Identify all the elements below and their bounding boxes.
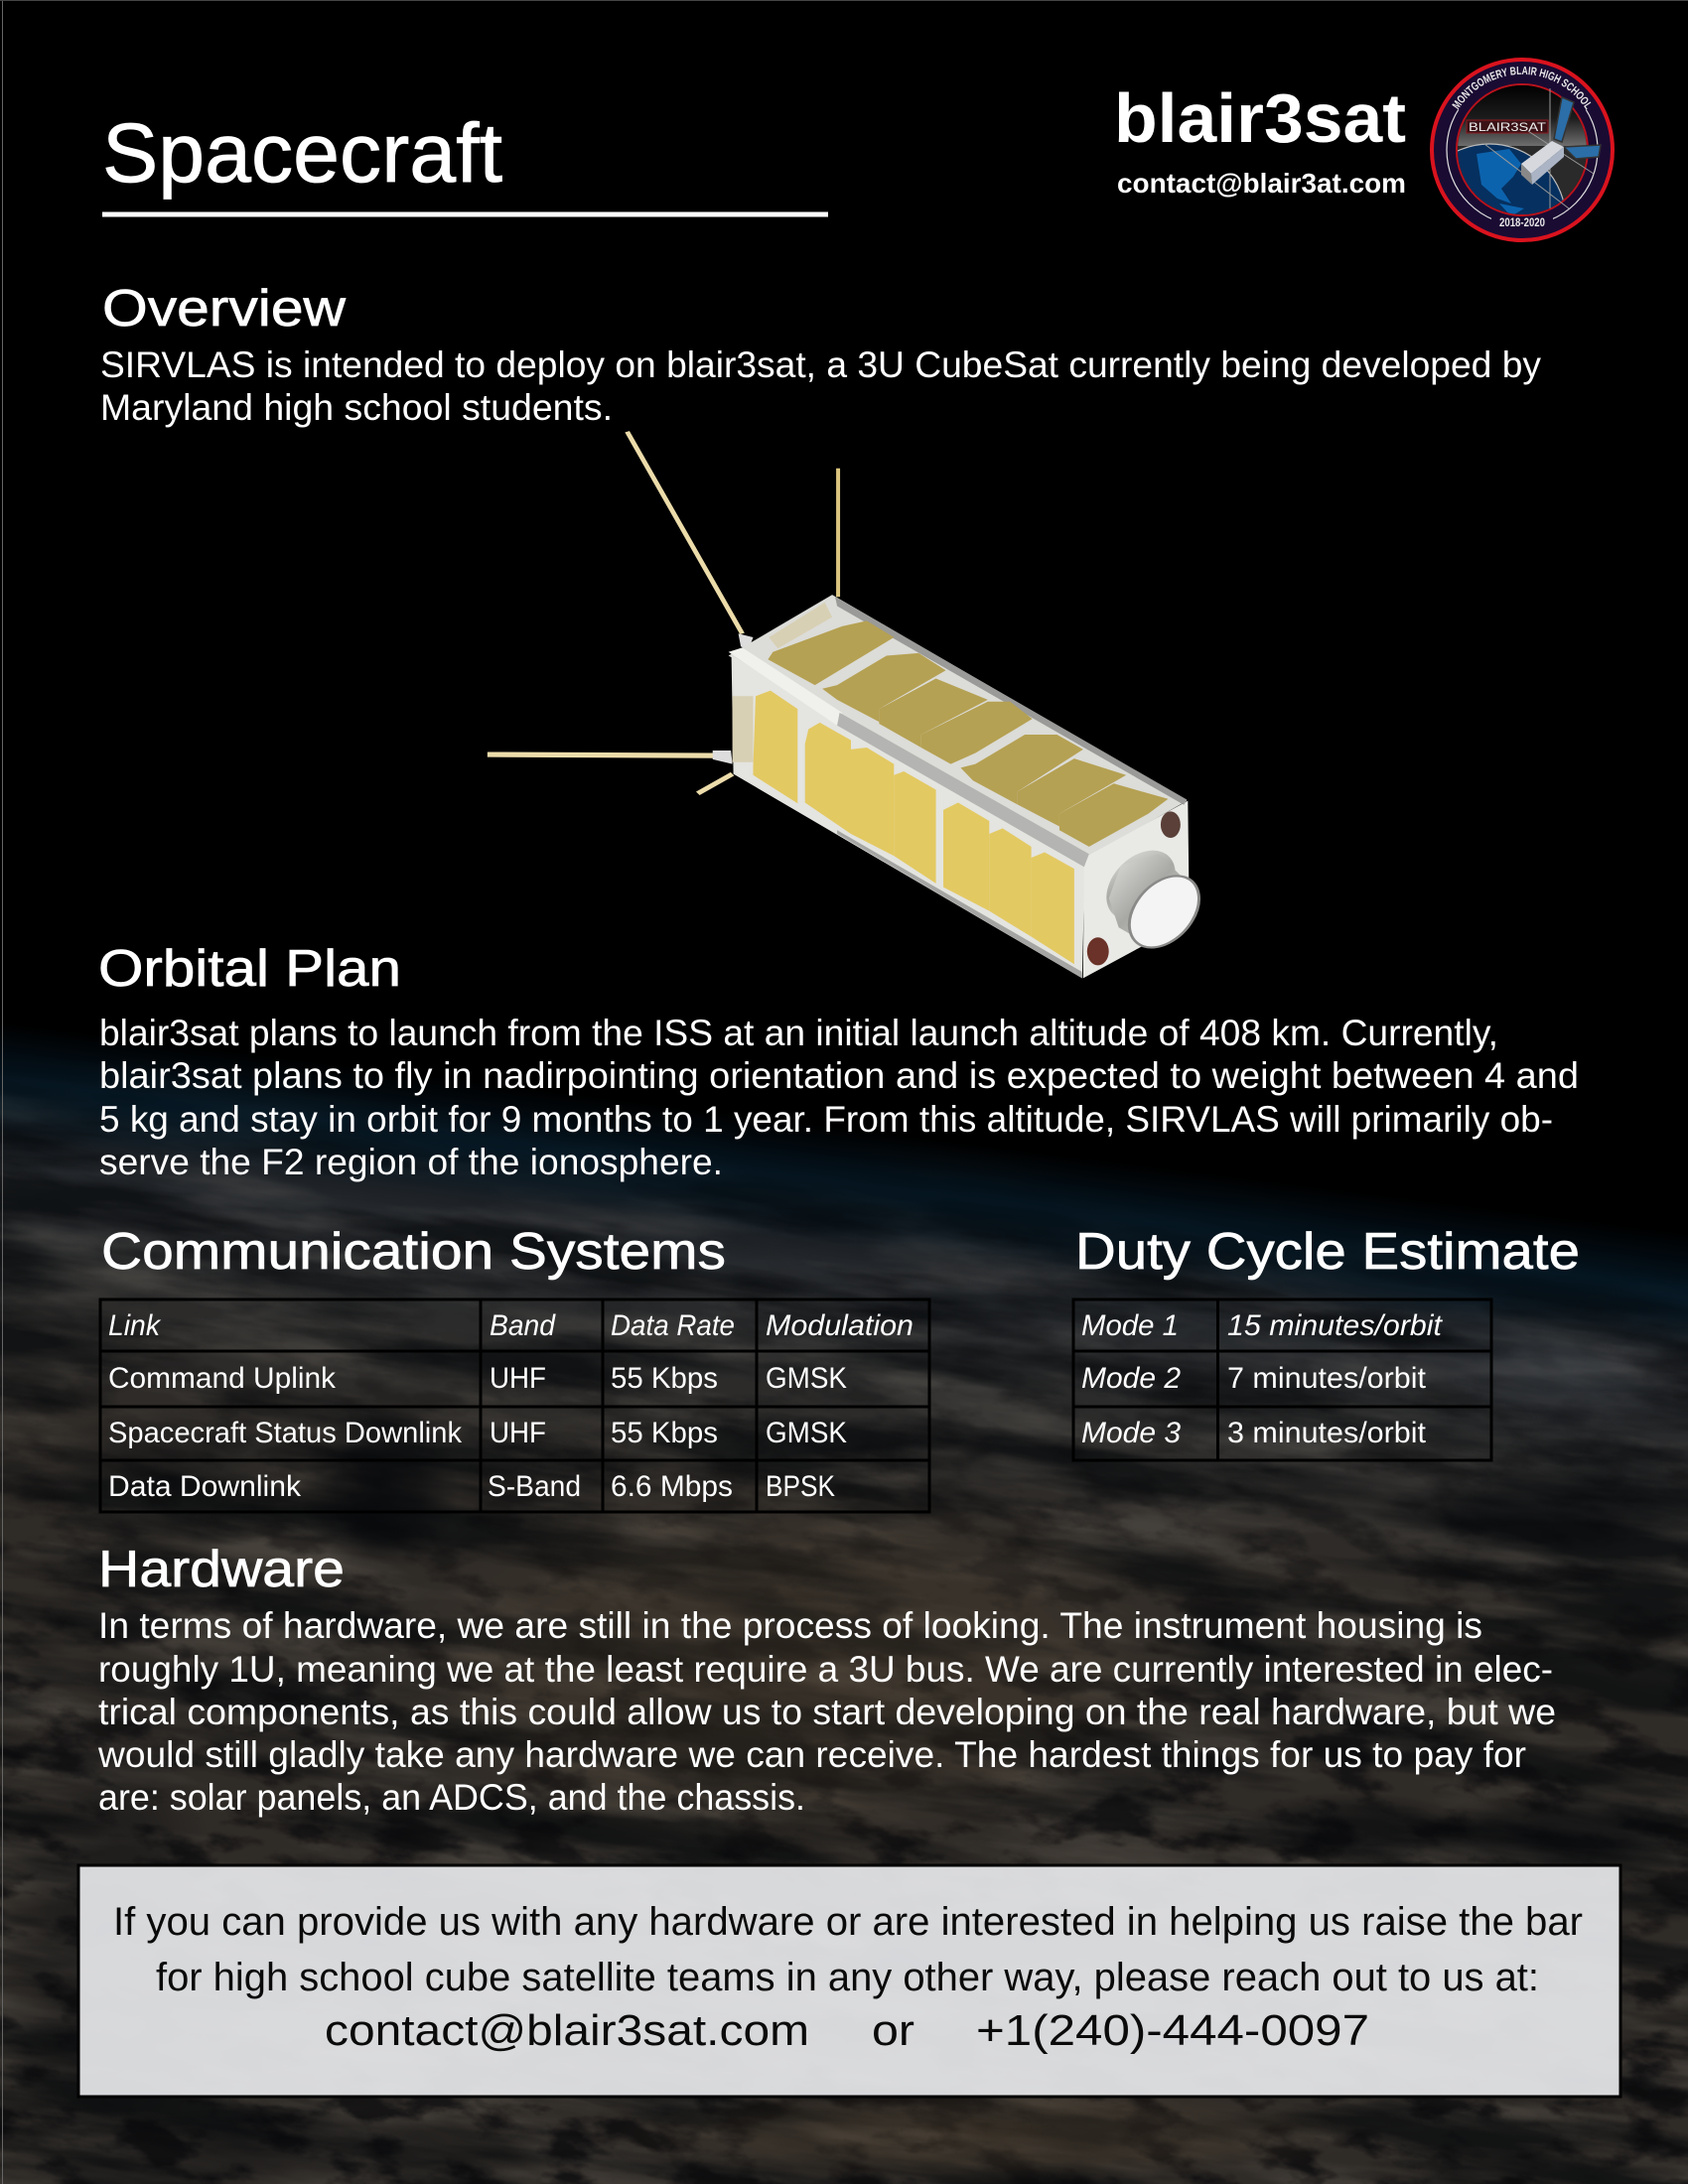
mode 1: Mode 1 [1081,1309,1179,1342]
orbital plan text [99,1013,1579,1182]
hardware text: In terms of hardware, we are still in the process of looking. The instrument housing is [98,1605,1482,1646]
title [102,106,828,216]
hardware text: are: solar panels, an ADCS, and the chassis. [98,1777,805,1818]
table: duty cycle [1073,1299,1491,1460]
overview text [100,344,1541,428]
row: data downlink: Data Downlink [108,1470,302,1503]
orbital plan text: blair3sat plans to fly in nadirpointing orientation and is expected to weight between 4 and [99,1055,1579,1096]
icon: mission patch: MONTGOMERY BLAIR HIGH SCHOOL [1452,67,1591,109]
hardware heading: Hardware [98,1541,345,1598]
header row: Data Rate [611,1309,735,1342]
contact email: contact@blair3at.com [1117,168,1406,199]
mode 2: 7 minutes/orbit [1227,1362,1427,1395]
callout: contact us: If you can provide us with any hardware or are interested in helping us raise the bar [113,1900,1583,1944]
brand name: blair3sat [1114,79,1406,157]
hardware text: roughly 1U, meaning we at the least require a 3U bus. We are currently interested in elec- [98,1649,1553,1690]
title: Spacecraft [102,106,502,200]
communication systems heading: Communication Systems [101,1223,726,1281]
row: status downlink: GMSK [766,1417,847,1449]
ports [1161,811,1181,838]
mode 3 [1081,1417,1427,1449]
callout: contact us: +1(240)-444-0097 [976,2006,1369,2055]
header row [108,1309,914,1342]
header row: Modulation [766,1309,914,1342]
row: data downlink [108,1470,835,1503]
callout: contact us: or [872,2006,914,2055]
callout: contact us: contact@blair3sat.com [325,2006,809,2055]
mode 2: Mode 2 [1081,1362,1181,1395]
row: command uplink: GMSK [766,1362,847,1395]
icon: mission patch [1430,58,1615,242]
row: command uplink: UHF [490,1362,546,1395]
duty cycle heading: Duty Cycle Estimate [1075,1223,1580,1281]
row: command uplink [108,1362,847,1395]
row: status downlink: 55 Kbps [611,1417,718,1449]
antennas [488,432,838,793]
row: command uplink: 55 Kbps [611,1362,718,1395]
hardware text [97,1605,1556,1818]
orbital plan text: 5 kg and stay in orbit for 9 months to 1 year. From this altitude, SIRVLAS will primarily ob- [99,1099,1553,1140]
header row: Band [490,1309,556,1342]
overview text: SIRVLAS is intended to deploy on blair3sat, a 3U CubeSat currently being developed by [100,344,1541,385]
hardware text: trical components, as this could allow us to start developing on the real hardware, but we [98,1692,1556,1732]
icon: mission patch: BLAIR3SAT [1469,120,1547,134]
hardware text: would still gladly take any hardware we can receive. The hardest things for us to pay for [97,1734,1526,1775]
mode 3: 3 minutes/orbit [1227,1417,1427,1449]
row: status downlink: UHF [490,1417,546,1449]
row: status downlink [108,1417,847,1449]
body faces [729,595,1187,858]
overview heading: Overview [102,280,346,338]
mode 1: 15 minutes/orbit [1227,1309,1444,1342]
header row: Link [108,1309,162,1342]
orbital plan heading: Orbital Plan [98,940,401,998]
table: communication systems [100,1299,929,1512]
rail [729,647,842,726]
CubeSat illustration [488,432,1212,978]
mode 2 [1081,1362,1427,1395]
row: data downlink: S-Band [488,1470,581,1503]
row: status downlink: Spacecraft Status Downlink [108,1417,463,1449]
lens barrel [1093,843,1189,928]
row: data downlink: 6.6 Mbps [611,1470,733,1503]
row: command uplink: Command Uplink [108,1362,337,1395]
orbital plan text: serve the F2 region of the ionosphere. [99,1142,723,1182]
callout: contact us: for high school cube satellite teams in any other way, please reach out to us at: [156,1956,1539,1999]
top solar panels [768,620,1168,847]
side solar panels [753,691,1074,964]
row: data downlink: BPSK [766,1470,835,1503]
callout: contact us [78,1865,1620,2097]
overview text: Maryland high school students. [100,387,613,428]
hinges [769,603,832,648]
orbital plan text: blair3sat plans to launch from the ISS at an initial launch altitude of 408 km. Currently, [99,1013,1498,1053]
mode 3: Mode 3 [1081,1417,1181,1449]
icon: mission patch: 2018-2020 [1499,215,1545,229]
mode 1 [1081,1309,1444,1342]
